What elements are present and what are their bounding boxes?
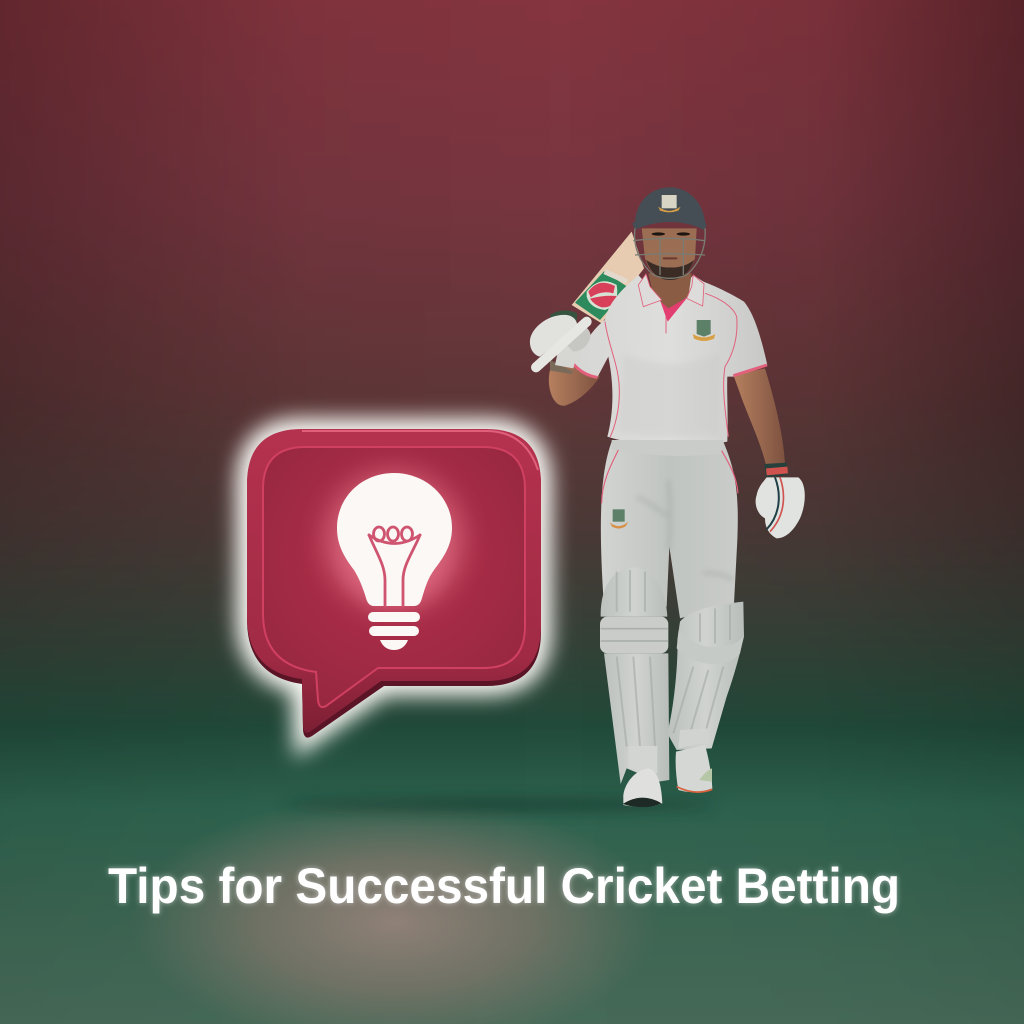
beard	[646, 260, 694, 280]
bubble inner panel	[263, 447, 525, 707]
shirt shading	[618, 353, 720, 437]
thigh badge	[610, 509, 628, 529]
helmet	[632, 187, 707, 230]
cricket player	[530, 187, 805, 807]
collar	[638, 274, 704, 307]
eyes and mouth	[652, 232, 690, 259]
lower body	[600, 440, 805, 807]
bubble dark lower edge	[247, 431, 541, 738]
neck	[648, 273, 692, 308]
bat blade	[572, 232, 644, 323]
trouser piping	[602, 450, 738, 503]
speech bubble with light bulb icon	[247, 429, 541, 738]
bubble glow	[247, 429, 541, 738]
helmet badge	[658, 195, 681, 212]
shirt	[573, 275, 767, 446]
filament	[369, 527, 420, 606]
title text: Tips for Successful Cricket Betting	[108, 858, 900, 914]
bubble top highlight	[302, 431, 538, 470]
bubble frame	[247, 429, 541, 733]
waistband	[612, 440, 723, 456]
right shoe	[676, 745, 712, 792]
trousers	[601, 442, 738, 618]
collar opening	[660, 298, 687, 322]
left batting pad	[600, 567, 669, 784]
right batting pad	[667, 602, 744, 750]
left shoe	[623, 768, 662, 807]
hanging glove	[756, 463, 805, 538]
title	[108, 858, 900, 914]
shirt piping	[573, 293, 767, 437]
floor shadow	[285, 798, 715, 812]
bulb glow	[324, 470, 464, 610]
bat handle and gloves	[530, 310, 591, 374]
bat sticker	[575, 271, 628, 320]
chest badge	[693, 320, 715, 341]
raised arm	[549, 362, 600, 406]
light bulb	[337, 473, 452, 650]
bulb base bars	[368, 612, 420, 650]
right arm	[733, 368, 785, 465]
trouser folds	[637, 480, 733, 580]
face	[642, 228, 697, 280]
bat label	[603, 269, 628, 284]
title glow: Tips for Successful Cricket Betting	[108, 858, 900, 914]
upper body	[530, 187, 785, 465]
helmet grille	[633, 228, 705, 278]
